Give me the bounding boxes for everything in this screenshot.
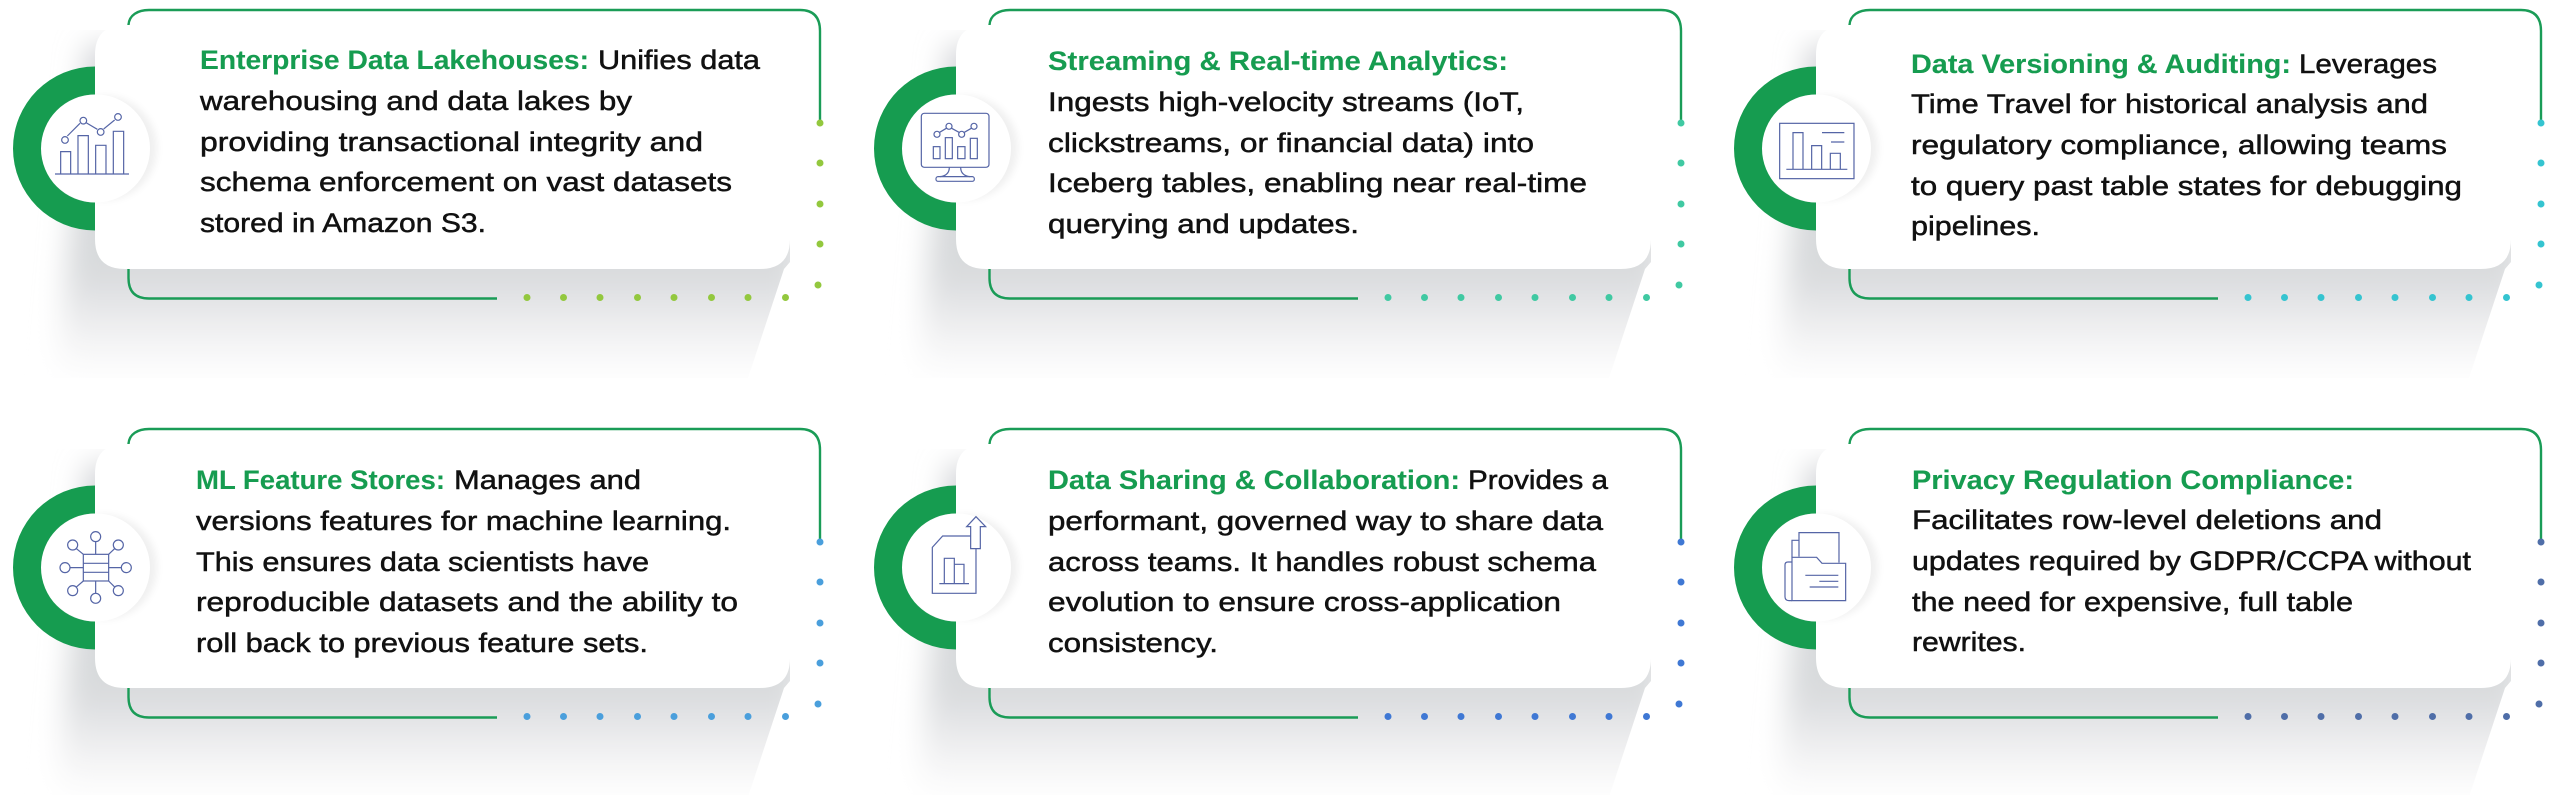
text: Enterprise Data Lakehouses: stored in Amazon S3. (200, 208, 486, 238)
text: Privacy Regulation Compliance: updates required by GDPR/CCPA without (1912, 546, 2472, 576)
panel: Data Versioning & Auditing (1734, 10, 2544, 395)
text: Privacy Regulation Compliance (1912, 465, 2472, 657)
text: Enterprise Data Lakehouses: providing transactional integrity and (200, 127, 703, 157)
icon: bar chart with trend line (55, 114, 129, 174)
text: Streaming & Real-time Analytics: Iceberg tables, enabling near real-time (1048, 168, 1587, 198)
dotted border (2244, 538, 2544, 720)
text: Enterprise Data Lakehouses (199, 45, 761, 238)
icon: monitor with chart (921, 113, 989, 181)
text: Data Versioning & Auditing: to query past table states for debugging (1911, 171, 2462, 201)
text: Enterprise Data Lakehouses: schema enforcement on vast datasets (200, 167, 732, 197)
panel: ML Feature Stores (13, 429, 823, 795)
text: Data Versioning & Auditing (1911, 49, 2462, 241)
text: ML Feature Stores: ML Feature Stores: (196, 465, 445, 495)
text: Privacy Regulation Compliance: Privacy Regulation Compliance: (1912, 465, 2354, 495)
text: Enterprise Data Lakehouses: warehousing and data lakes by (199, 86, 633, 116)
panel: Streaming & Real-time Analytics (874, 10, 1684, 395)
dotted border (524, 120, 824, 301)
dotted border (2244, 120, 2544, 301)
text: ML Feature Stores: roll back to previous feature sets. (196, 628, 648, 658)
text: Data Sharing & Collaboration: Data Sharing & Collaboration: (1048, 465, 1460, 495)
text: Data Sharing & Collaboration: performant, governed way to share data (1048, 506, 1604, 536)
text: Data Sharing & Collaboration (1048, 465, 1609, 658)
text: Data Versioning & Auditing: Data Versioning & Auditing: (1911, 49, 2291, 79)
icon: network of nodes (60, 532, 131, 603)
text: Streaming & Real-time Analytics: querying and updates. (1048, 209, 1359, 239)
icon: folder with documents (1785, 533, 1846, 601)
text: ML Feature Stores: versions features for machine learning. (196, 506, 731, 536)
text: Data Versioning & Auditing: regulatory compliance, allowing teams (1911, 130, 2447, 160)
icon: report with bars (1780, 123, 1854, 179)
text: Streaming & Real-time Analytics (1048, 46, 1587, 239)
dotted border (1384, 538, 1684, 720)
text: Privacy Regulation Compliance: the need for expensive, full table (1912, 587, 2353, 617)
text: Data Versioning & Auditing: Time Travel for historical analysis and (1911, 89, 2428, 119)
text: Privacy Regulation Compliance: Facilitates row-level deletions and (1912, 505, 2382, 535)
text: ML Feature Stores: Manages and (454, 465, 641, 495)
panel: Privacy Regulation Compliance (1734, 429, 2544, 795)
text: Streaming & Real-time Analytics: clickstreams, or financial data) into (1048, 128, 1534, 158)
text: Enterprise Data Lakehouses: Enterprise Data Lakehouses: (200, 45, 589, 75)
panel: Enterprise Data Lakehouses (13, 10, 823, 395)
panel: Data Sharing & Collaboration (874, 429, 1684, 795)
dotted border (1384, 120, 1684, 301)
text: Data Sharing & Collaboration: evolution to ensure cross-application (1048, 587, 1561, 617)
text: ML Feature Stores (196, 465, 738, 658)
text: Data Versioning & Auditing: Leverages (2299, 49, 2437, 79)
text: Data Sharing & Collaboration: consistency. (1048, 628, 1218, 658)
text: ML Feature Stores: reproducible datasets and the ability to (196, 587, 738, 617)
text: Enterprise Data Lakehouses: Unifies data (598, 45, 761, 75)
text: Data Versioning & Auditing: pipelines. (1911, 211, 2040, 241)
text: Streaming & Real-time Analytics: Ingests high-velocity streams (IoT, (1048, 87, 1524, 117)
dotted border (524, 538, 824, 720)
icon: document with upward arrow (932, 517, 986, 593)
text: ML Feature Stores: This ensures data scientists have (196, 547, 649, 577)
text: Privacy Regulation Compliance: rewrites. (1912, 627, 2026, 657)
text: Data Sharing & Collaboration: Provides a (1468, 465, 1609, 495)
text: Streaming & Real-time Analytics: Streaming & Real-time Analytics: (1048, 46, 1508, 76)
text: Data Sharing & Collaboration: across teams. It handles robust schema (1048, 547, 1597, 577)
